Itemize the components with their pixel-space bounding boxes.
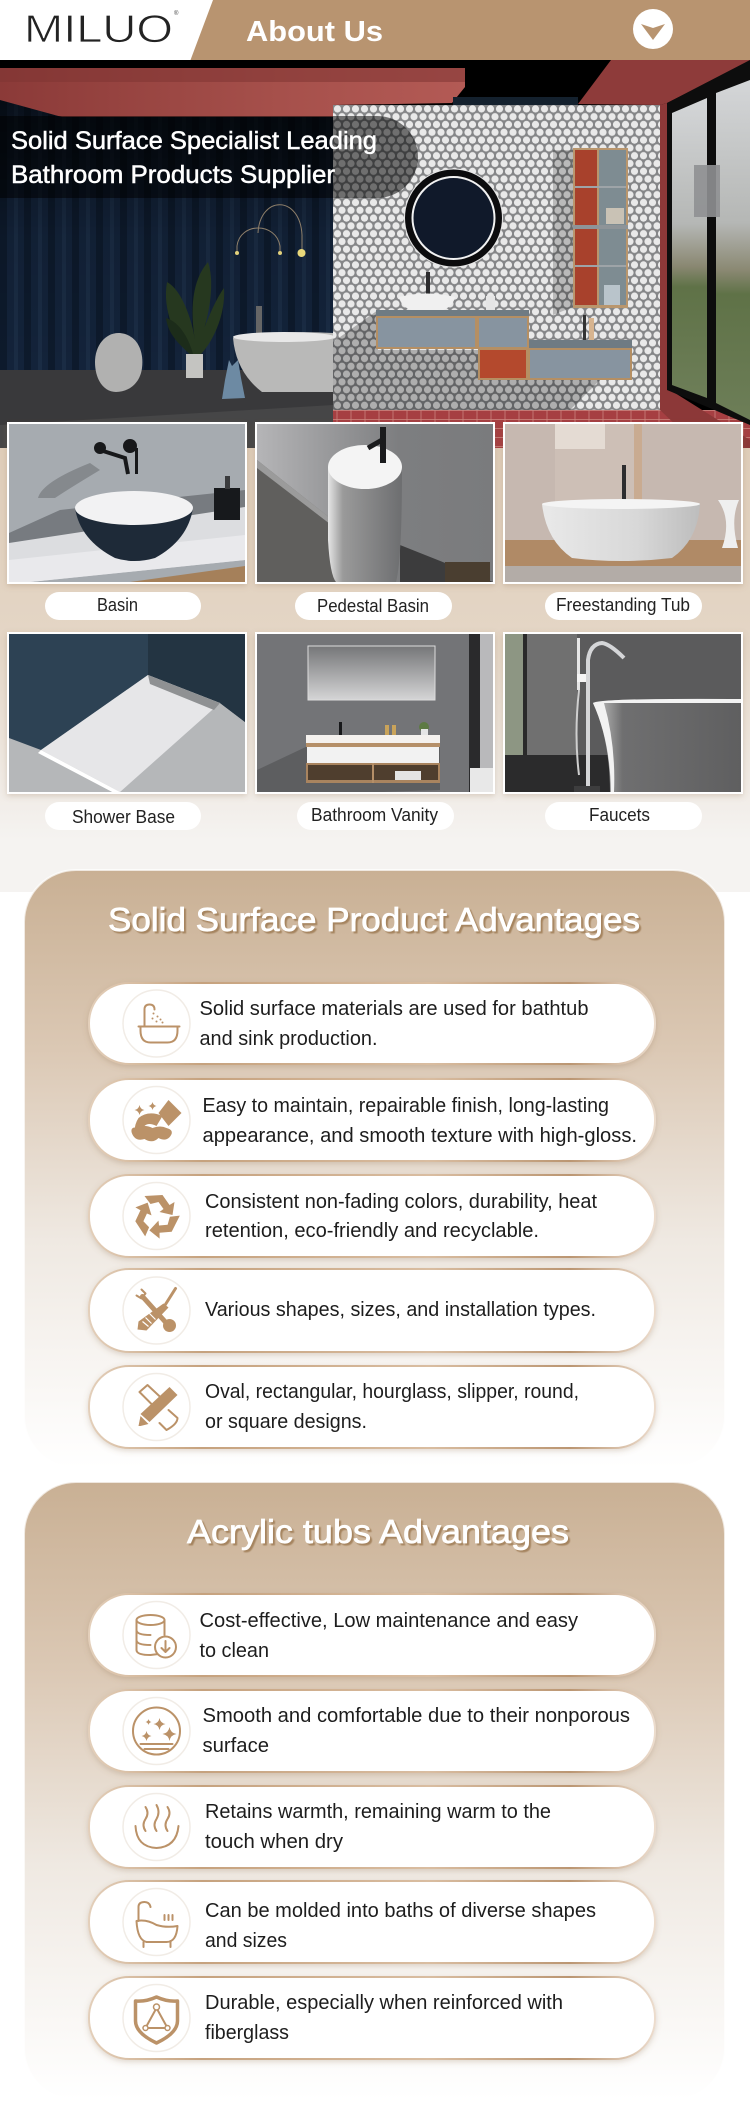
tiled wall	[333, 105, 660, 410]
icon: wrench and screwdriver	[123, 1277, 190, 1344]
icon: rising warmth	[123, 1794, 190, 1860]
item text: surface	[202, 1735, 269, 1757]
pendant lights	[235, 205, 306, 257]
item text	[205, 1900, 596, 1952]
icon: bathtub with shower	[123, 990, 190, 1057]
header title: About Us	[246, 16, 383, 48]
hero heading: Solid Surface Specialist Leading	[11, 127, 377, 155]
red side wall and ceiling	[453, 60, 750, 448]
item text	[200, 1610, 578, 1662]
red floor	[333, 410, 750, 448]
panel: Solid Surface Product Advantages	[24, 870, 725, 1468]
photo: shower base	[7, 632, 247, 794]
photo: faucets	[503, 632, 743, 794]
item text: Smooth and comfortable due to their nonporous	[202, 1705, 630, 1727]
item text: to clean	[200, 1640, 269, 1662]
plant	[166, 262, 224, 378]
item text: and sizes	[205, 1930, 287, 1952]
item text	[202, 1705, 630, 1757]
pill label	[45, 802, 201, 830]
bunny figurine	[222, 360, 245, 399]
pill label: Pedestal Basin	[317, 596, 429, 616]
item text: fiberglass	[205, 2022, 289, 2044]
product card: Bathroom Vanity	[255, 632, 495, 830]
item text: Various shapes, sizes, and installation types.	[205, 1299, 596, 1321]
item text: touch when dry	[205, 1831, 343, 1853]
item text: Durable, especially when reinforced with	[205, 1992, 563, 2014]
item text	[205, 1801, 551, 1853]
pill label: Freestanding Tub	[556, 595, 690, 615]
egg toilet	[95, 333, 142, 392]
header bar	[0, 0, 750, 60]
item: oval, rectangular designs	[89, 1366, 655, 1448]
photo: pedestal basin	[255, 422, 495, 584]
item text: or square designs.	[205, 1411, 367, 1433]
item text: Easy to maintain, repairable finish, long-lasting	[202, 1095, 609, 1117]
item text: Consistent non-fading colors, durability, heat	[205, 1191, 597, 1213]
photo: bathroom vanity	[255, 632, 495, 794]
heading: Solid Surface Product Advantages	[108, 901, 640, 938]
pill label: Shower Base	[72, 807, 175, 827]
window	[667, 60, 750, 425]
item text: Retains warmth, remaining warm to the	[205, 1801, 551, 1823]
product card: Faucets	[503, 632, 743, 830]
left dark room	[0, 68, 465, 448]
item: various shapes	[89, 1269, 655, 1352]
item text: Oval, rectangular, hourglass, slipper, round,	[205, 1381, 579, 1403]
item: can be molded	[89, 1881, 655, 1963]
hero photo: bathroom interior	[0, 60, 750, 448]
product card: Basin	[7, 422, 247, 620]
item: durable	[89, 1977, 655, 2059]
item text: appearance, and smooth texture with high-gloss.	[202, 1125, 637, 1147]
wall cabinet	[573, 148, 628, 308]
icon: clawfoot bathtub	[123, 1888, 190, 1956]
icon: pencil and rulers	[123, 1374, 190, 1440]
item text: Cost-effective, Low maintenance and easy	[200, 1610, 578, 1632]
icon: down arrow badge	[633, 9, 673, 49]
item text: Can be molded into baths of diverse shapes	[205, 1900, 596, 1922]
icon: cleaning hand	[123, 1086, 190, 1154]
floating vanity	[376, 272, 632, 380]
pill label: Basin	[97, 595, 138, 615]
item text: and sink production.	[200, 1028, 378, 1050]
pill label	[295, 592, 452, 620]
pill label	[545, 802, 702, 830]
photo: basin	[7, 422, 247, 584]
text overlay	[0, 116, 418, 198]
logo: MILUO	[24, 8, 173, 51]
product card: Freestanding Tub	[503, 422, 743, 620]
item text	[200, 998, 588, 1050]
icon: polished surface with sparkles	[123, 1698, 190, 1764]
item text	[202, 1095, 637, 1147]
item text: Solid surface materials are used for bathtub	[200, 998, 588, 1020]
icon: coin stack with arrow	[123, 1602, 190, 1668]
pill label	[45, 592, 201, 620]
round mirror	[404, 169, 502, 267]
pill label	[545, 592, 702, 620]
photo: freestanding tub	[503, 422, 743, 584]
item: solid surface materials	[89, 983, 655, 1064]
hero heading: Bathroom Products Supplier	[11, 161, 335, 189]
logo: ®	[174, 10, 179, 17]
pill label: Faucets	[589, 805, 650, 825]
product card: Pedestal Basin	[255, 422, 495, 620]
heading: Acrylic tubs Advantages	[187, 1513, 569, 1550]
item text	[205, 1191, 597, 1242]
item text: retention, eco-friendly and recyclable.	[205, 1220, 539, 1242]
item: cost-effective	[89, 1594, 655, 1676]
icon: shield with triangle	[123, 1984, 190, 2052]
item: smooth and comfortable	[89, 1690, 655, 1772]
product card: Shower Base	[7, 632, 247, 830]
item text	[205, 1992, 563, 2044]
item: retains warmth	[89, 1786, 655, 1868]
left tub	[233, 306, 335, 392]
pill label	[297, 802, 454, 830]
item text	[205, 1381, 579, 1433]
pill label: Bathroom Vanity	[311, 805, 438, 825]
icon: recycle	[123, 1182, 190, 1250]
hero heading	[11, 127, 377, 189]
panel: Acrylic tubs Advantages	[24, 1482, 725, 2100]
item: consistent colors	[89, 1175, 655, 1257]
item: easy to maintain	[89, 1079, 655, 1161]
